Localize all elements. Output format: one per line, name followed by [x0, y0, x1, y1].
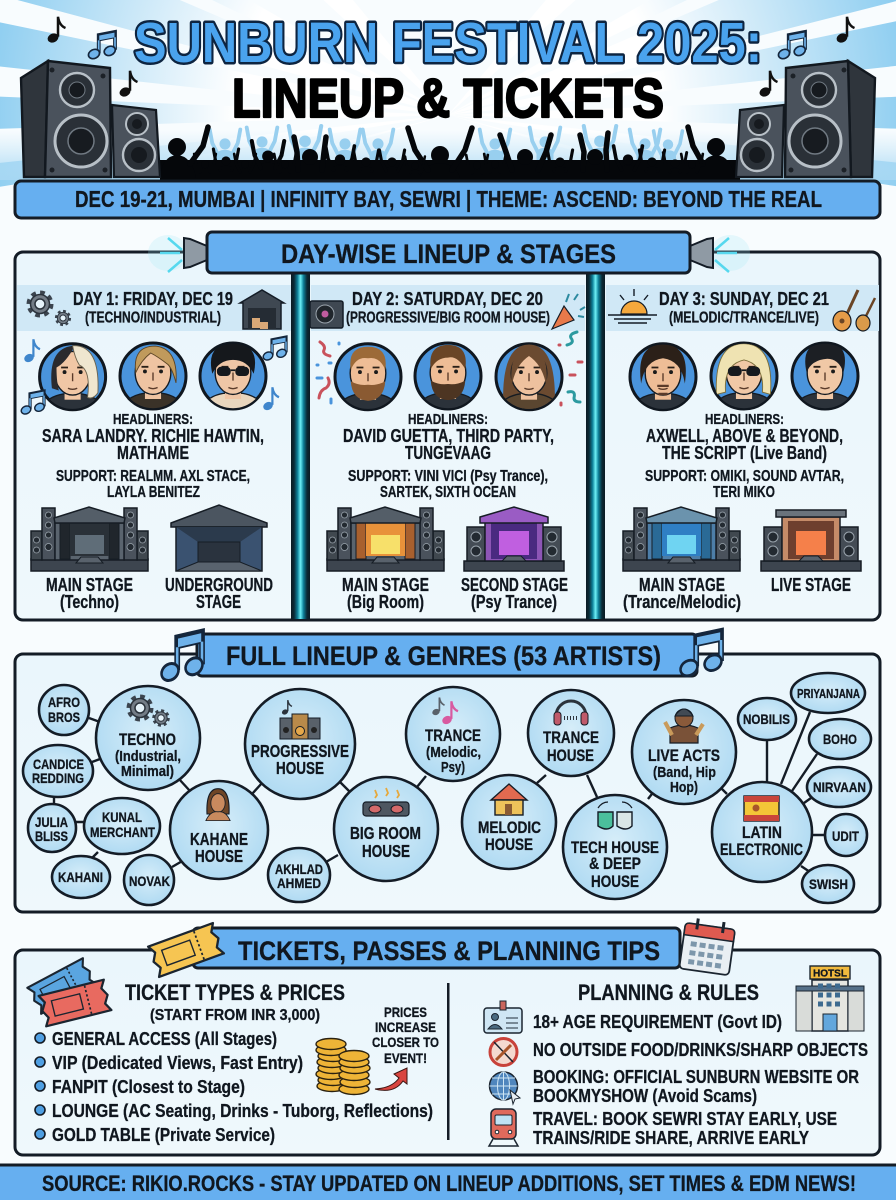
genre: trance house: HOUSE	[547, 746, 594, 765]
artist: julia bliss: JULIA	[35, 814, 68, 830]
day 1 title: DAY 1: FRIDAY, DEC 19	[73, 288, 233, 309]
headliners day 2: HEADLINERS:	[408, 411, 488, 428]
day 2 genre: (PROGRESSIVE/BIG ROOM HOUSE)	[346, 310, 550, 326]
genre: live acts: (Band, Hip	[653, 764, 716, 781]
panel: day-wise lineup	[15, 232, 880, 620]
genre: big room house: HOUSE	[362, 841, 410, 861]
ticket types column	[27, 958, 439, 1145]
day 3 genre: (MELODIC/TRANCE/LIVE)	[669, 310, 819, 326]
music notes	[46, 17, 855, 98]
second stage: (Psy Trance)	[471, 592, 557, 612]
genre: techno: (Industrial,	[115, 748, 181, 765]
artist: akhlad ahmed	[268, 848, 330, 902]
genre: tech house and deep house: & DEEP	[589, 854, 641, 873]
ticket type list: GENERAL ACCESS (All Stages)	[52, 1029, 277, 1049]
avatars day 3	[628, 343, 860, 416]
ticket type list: LOUNGE (AC Seating, Drinks - Tuborg, Reflections)	[52, 1101, 433, 1121]
artist: kunal merchant: MERCHANT	[90, 824, 155, 840]
icon: note left	[159, 632, 205, 684]
genre: progressive house: HOUSE	[276, 758, 324, 778]
artist: candice redding: REDDING	[32, 770, 84, 786]
headliners day 1	[42, 411, 264, 463]
sunburst rays	[0, 0, 896, 215]
genre: trance: TRANCE	[425, 726, 481, 745]
section heading: tickets: TICKETS, PASSES & PLANNING TIPS	[238, 936, 660, 966]
artist: afro bros	[39, 685, 89, 735]
headliners day 2: DAVID GUETTA, THIRD PARTY,	[343, 426, 554, 446]
price increase callout: INCREASE	[375, 1019, 436, 1035]
day 2 title: DAY 2: SATURDAY, DEC 20	[352, 288, 543, 309]
day 1 column	[17, 285, 291, 612]
underground stage: STAGE	[196, 592, 241, 612]
artist: kunal merchant	[84, 798, 160, 854]
underground stage	[165, 505, 273, 612]
artist: afro bros: BROS	[48, 709, 80, 725]
icon: warehouse	[240, 290, 284, 329]
genre: progressive house	[245, 689, 355, 799]
icon: turntable	[310, 301, 343, 328]
genre: trance: Psy)	[441, 759, 465, 776]
genre: kahane house: HOUSE	[195, 846, 243, 866]
artist: nirvaan	[807, 767, 871, 807]
icon: hotel: HOTSL	[813, 968, 847, 980]
support day 2	[348, 468, 548, 501]
rule: booking	[533, 1067, 859, 1106]
headliners day 1: HEADLINERS:	[113, 411, 193, 428]
artist: afro bros: AFRO	[48, 694, 80, 710]
icon: note right	[678, 631, 724, 679]
icon: sunset	[608, 289, 657, 323]
headliners day 3	[646, 411, 843, 463]
panel: full lineup and genres	[15, 631, 880, 912]
icon: gears	[29, 293, 70, 325]
arrow: price rise	[375, 1068, 407, 1090]
genre: techno	[96, 686, 200, 790]
genre: kahane house	[170, 781, 268, 879]
rule: travel: TRAVEL: BOOK SEWRI STAY EARLY, USE	[533, 1109, 837, 1129]
neon divider 1	[291, 272, 310, 619]
planning heading: PLANNING & RULES	[578, 980, 759, 1005]
headliners day 3: THE SCRIPT (Live Band)	[662, 443, 827, 463]
ticket subheading: (START FROM INR 3,000)	[150, 1007, 320, 1024]
artist: kahani: KAHANI	[58, 869, 103, 885]
icon: party popper	[552, 294, 585, 329]
title line 1: SUNBURN FESTIVAL 2025:	[134, 11, 762, 75]
genre: melodic house	[462, 775, 556, 869]
genre: latin electronic: ELECTRONIC	[720, 840, 803, 859]
icon: yellow ticket	[148, 923, 224, 977]
genre: trance: (Melodic,	[426, 744, 481, 761]
price increase callout: PRICES	[384, 1004, 427, 1020]
genre: melodic house: HOUSE	[485, 835, 533, 854]
artist: novak	[124, 855, 174, 905]
icon: globe	[490, 1072, 520, 1104]
footer banner	[0, 1165, 896, 1200]
genre: live acts: Hop)	[670, 779, 698, 796]
artist: priyanjana: PRIYANJANA	[797, 686, 860, 701]
headliners day 2	[343, 411, 554, 463]
price increase callout	[372, 1004, 439, 1066]
genre: trance	[406, 687, 500, 781]
panel: tickets and planning	[15, 917, 880, 1155]
headliners day 3: HEADLINERS:	[705, 411, 784, 428]
main stage big room: (Big Room)	[347, 592, 424, 612]
second stage	[461, 507, 568, 612]
section heading: day-wise: DAY-WISE LINEUP & STAGES	[281, 239, 616, 269]
artist: akhlad ahmed: AHMED	[277, 875, 321, 891]
headliners day 1: SARA LANDRY. RICHIE HAWTIN,	[42, 426, 264, 446]
crowd silhouette	[160, 126, 740, 195]
rule: travel: TRAINS/RIDE SHARE, ARRIVE EARLY	[533, 1128, 809, 1148]
ticket heading: TICKET TYPES & PRICES	[125, 980, 345, 1005]
artist: nobilis	[738, 698, 796, 740]
right speakers	[736, 61, 875, 177]
day 1 header	[17, 285, 291, 331]
support day 1: LAYLA BENITEZ	[107, 484, 200, 501]
genre: tech house and deep house: HOUSE	[591, 872, 639, 891]
ticket type list: FANPIT (Closest to Stage)	[52, 1077, 245, 1097]
icon: tickets	[27, 958, 111, 1026]
icon: prohibited	[490, 1038, 517, 1066]
genre: kahane house: KAHANE	[190, 829, 248, 849]
left speakers	[21, 61, 160, 177]
day 2 header	[310, 285, 585, 331]
underground stage: UNDERGROUND	[165, 575, 273, 595]
artist: candice redding	[23, 745, 93, 797]
bubble connectors	[54, 712, 825, 872]
support day 3: TERI MIKO	[713, 484, 775, 501]
rule: travel	[533, 1109, 837, 1148]
ticket type list: VIP (Dedicated Views, Fast Entry)	[52, 1053, 303, 1073]
headliners day 2: TUNGEVAAG	[405, 443, 491, 463]
genre: melodic house: MELODIC	[478, 818, 541, 837]
neon divider 2	[586, 272, 605, 619]
icon: calendar	[679, 917, 736, 975]
icon: hotel	[796, 966, 864, 1031]
section heading: full lineup: FULL LINEUP & GENRES (53 ARTISTS)	[226, 641, 661, 671]
artist: akhlad ahmed: AKHLAD	[275, 861, 323, 877]
column divider	[447, 983, 450, 1140]
planning column	[484, 966, 868, 1148]
live stage: LIVE STAGE	[771, 575, 851, 595]
genre: latin electronic: LATIN	[742, 823, 782, 842]
artist: candice redding: CANDICE	[33, 756, 84, 772]
genre: big room house: BIG ROOM	[350, 823, 421, 843]
icon: guitars	[833, 290, 875, 331]
icon: id badge	[484, 1001, 522, 1033]
genre: latin electronic	[712, 782, 812, 882]
genre: progressive house: PROGRESSIVE	[251, 741, 349, 761]
genre: trance house	[528, 690, 614, 776]
support day 2: SARTEK, SIXTH OCEAN	[380, 484, 516, 501]
live stage	[761, 510, 861, 595]
genre: trance house: TRANCE	[543, 728, 599, 747]
ticket type list	[35, 1029, 433, 1145]
support day 3: SUPPORT: OMIKI, SOUND AVTAR,	[645, 468, 844, 485]
artist: kunal merchant: KUNAL	[102, 809, 142, 825]
day 3 column	[606, 285, 879, 612]
genre: techno: Minimal)	[121, 763, 174, 780]
genre: big room house	[334, 777, 438, 881]
artist: boho	[809, 719, 871, 759]
section heading: full lineup	[159, 631, 724, 684]
day 2 column	[310, 285, 585, 612]
artist: boho: BOHO	[823, 731, 857, 747]
main stage techno: MAIN STAGE	[46, 575, 133, 595]
headliners day 3: AXWELL, ABOVE & BEYOND,	[646, 426, 843, 446]
genre: tech house and deep house	[563, 795, 667, 899]
rule: booking: BOOKMYSHOW (Avoid Scams)	[533, 1086, 757, 1106]
genre: tech house and deep house: TECH HOUSE	[571, 838, 659, 857]
artist: novak: NOVAK	[129, 873, 170, 889]
support day 1: SUPPORT: REALMM. AXL STACE,	[56, 468, 250, 485]
second stage: SECOND STAGE	[461, 575, 568, 595]
genre: live acts	[632, 700, 736, 804]
artist: udit: UDIT	[832, 828, 859, 844]
icon: train	[489, 1109, 518, 1146]
main stage big room: MAIN STAGE	[342, 575, 429, 595]
price increase callout: CLOSER TO	[372, 1034, 439, 1050]
main stage trance	[623, 507, 741, 612]
genre: live acts: LIVE ACTS	[648, 746, 720, 765]
info banner	[15, 181, 880, 218]
section heading: day-wise	[148, 232, 750, 273]
artist: swish: SWISH	[809, 876, 848, 892]
main stage techno: (Techno)	[60, 592, 119, 612]
artist: swish	[802, 865, 854, 903]
artist: priyanjana	[791, 673, 865, 713]
support day 3	[645, 468, 844, 501]
day 3 header	[606, 285, 879, 331]
main stage techno	[31, 507, 148, 612]
avatars day 1	[20, 337, 288, 416]
icon: coin stacks	[316, 1038, 370, 1094]
rule: age: 18+ AGE REQUIREMENT (Govt ID)	[533, 1012, 782, 1032]
artist: julia bliss: BLISS	[35, 828, 68, 844]
day 3 title: DAY 3: SUNDAY, DEC 21	[659, 288, 829, 309]
main stage trance: MAIN STAGE	[639, 575, 725, 595]
support day 2: SUPPORT: VINI VICI (Psy Trance),	[348, 468, 548, 485]
support day 1	[56, 468, 250, 501]
artist: julia bliss	[28, 804, 76, 852]
avatars day 2	[317, 332, 582, 416]
title line 2: LINEUP & TICKETS	[232, 67, 664, 129]
title	[134, 11, 762, 129]
artist: udit	[825, 814, 867, 856]
artist: kahani	[52, 856, 110, 898]
genre: techno: TECHNO	[119, 730, 176, 749]
confetti	[317, 332, 582, 405]
day 1 genre: (TECHNO/INDUSTRIAL)	[85, 310, 221, 326]
section heading: tickets	[148, 917, 736, 977]
headliners day 1: MATHAME	[117, 443, 189, 463]
artist: nirvaan: NIRVAAN	[813, 779, 866, 795]
artist: nobilis: NOBILIS	[743, 711, 790, 727]
price increase callout: EVENT!	[384, 1050, 427, 1066]
main stage big room	[327, 507, 444, 612]
main stage trance: (Trance/Melodic)	[623, 592, 741, 612]
ticket type list: GOLD TABLE (Private Service)	[52, 1125, 275, 1145]
